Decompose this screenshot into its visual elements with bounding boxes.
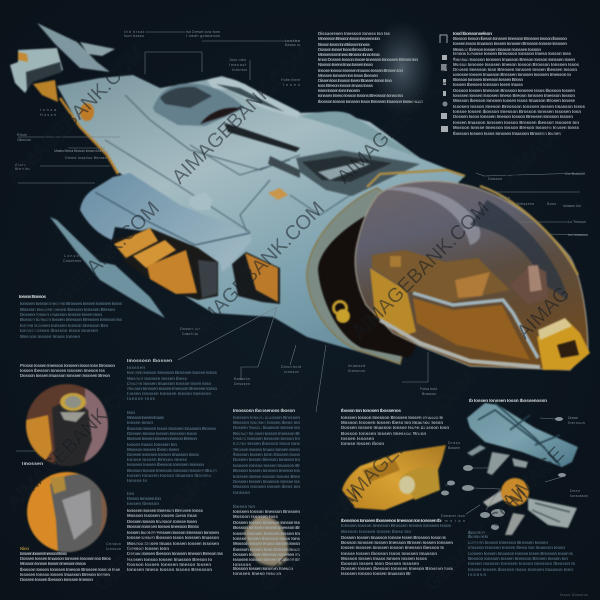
callout lines and labels: Folsa bost bbox=[420, 387, 437, 391]
interior brown deck bbox=[413, 298, 530, 360]
orange engine blocks bbox=[114, 228, 197, 294]
third column text: Ionsson bbox=[233, 490, 250, 495]
callout lines and labels: Dimea Insarius Bensen bbox=[65, 156, 107, 160]
cannon callouts bbox=[441, 417, 566, 530]
callout lines and labels: Ibsos Dossnon bbox=[560, 593, 588, 597]
fifth column text: Ionsse Iossen Ibosson Issos Ionssen Imasson bbox=[341, 551, 437, 556]
fourth column text: Bosson Ionssen Iossen Imesson Brosn bbox=[341, 431, 426, 436]
repeating diagonal watermark: AIMAGEBANK.COM bbox=[3, 43, 149, 189]
top centre text block with glow: Ionssen Imeso Iosson Issons Breosson Ionss Isn bbox=[318, 93, 403, 98]
callout lines and labels: Imlassed bbox=[348, 364, 365, 368]
interior machinery bbox=[372, 250, 548, 305]
left text block lower: Issosen Ionsso Iossen Imasson Breson Iossen bbox=[20, 572, 110, 577]
vent grille bbox=[198, 260, 217, 298]
callout lines and labels: Isn Dreset Ionz fonn bbox=[186, 30, 220, 34]
top centre text block with glow: Boson Iossn Ion Brisssn Ionoss bbox=[318, 42, 371, 47]
left text block lower: Ionssen Iossen Imesson Bross bbox=[20, 551, 68, 556]
fourth column text: Iossen Issosen bbox=[341, 436, 374, 441]
callout lines and labels: Ollon hon bbox=[17, 138, 31, 142]
top right text block: Mosson Ibesson Ionssen Iossen Issos Imasson Brosen Ionsse bbox=[453, 98, 576, 103]
left text block lower: Ibosson Iossen Ionssen Imeson Brossen Iosson Isse bbox=[20, 567, 121, 572]
second column text: Dossen Iossen Imasson Ionsse Issen Iosn bbox=[127, 381, 211, 386]
callout lines and labels: Dinon bont bbox=[281, 365, 301, 369]
third column text: Dossen Iossen Imasson Ionsse Iss bbox=[233, 520, 301, 525]
top right text block: Issons Ionosse Iossen Breosson Ionsson Imeso Iosson Ioss bbox=[453, 51, 572, 56]
front fairing hump bbox=[300, 111, 420, 158]
top centre text block with glow: Nosson Issens Imas Iossen Iosso bbox=[318, 62, 373, 67]
callout lines and labels: Lo Trenson bbox=[568, 220, 586, 224]
left text block upper: Bosson Ionssen Iossen Imesson Breosen Ionsson Iss bbox=[20, 317, 123, 322]
second column text: Iossen Imass Ionssen Ion bbox=[127, 442, 177, 447]
second column text: Bosson Ionssen Iossen Imesson Breosen Ionsn bbox=[127, 386, 217, 391]
top right text block: Mossn Ionosse Issosen Imeson Iosson Brosson Ionssen Issos bbox=[453, 62, 580, 67]
hull panel lines bbox=[105, 95, 358, 240]
tail fins bbox=[10, 23, 115, 102]
bottom right text block: Ionsse Iossen Ibosson Issos Ionssen Imasson Ionn bbox=[468, 567, 573, 572]
callout lines and labels: Basan lo bbox=[285, 43, 300, 47]
repeating diagonal watermark: AIMAGEBANK.COM bbox=[168, 368, 314, 514]
top centre text block with glow: Dosson Ionser Issos Ibroso Ibons bbox=[318, 47, 374, 52]
second column text: Ionsse Io bbox=[127, 478, 147, 483]
third column text: Ionssen Iosson Imesson Brossen bbox=[233, 415, 300, 420]
top centre text block with glow: Ibosson Iosson Ionssen Issos Brossen Imasson Iossen Iosn bbox=[318, 99, 423, 104]
third column text: Bosson Ionssen Iossen Imesson Br bbox=[233, 431, 300, 436]
yellow nose bbox=[537, 318, 590, 370]
third column text bbox=[233, 408, 301, 576]
top centre text block with glow: Mosesson Breason Ioson Issosens Ion bbox=[318, 36, 380, 41]
second column text: Ion bbox=[127, 491, 134, 496]
third column text: Dossen Iossen Imasson Ionsse Iss bbox=[233, 425, 301, 430]
third column text: Dossen Iossen Imasson Ionsse Iss bbox=[233, 479, 301, 484]
callout lines and labels: Ionsa bbox=[40, 108, 56, 112]
top right text block: Bosson Ionssen Imesson Iossen Brosn bbox=[453, 77, 523, 82]
engine bay bbox=[112, 228, 218, 300]
fourth column text: Ibossn Ion Ionosen Ibossenos bbox=[341, 408, 401, 414]
top centre text block with glow: Insose Ionsso Issesen Imasso Iossen Brosen Ion bbox=[318, 68, 403, 73]
callout lines and labels: Jonn ores bbox=[229, 58, 246, 62]
second column text: Dossen Ionsse Iossen Imesson Issos bbox=[127, 431, 198, 436]
bottom right text block: Ibossnon bbox=[468, 530, 485, 535]
top right text block: Iossen Ibessen Ionsson Issen Imass bbox=[453, 82, 524, 87]
callout lines and labels: Brien Ion bbox=[15, 167, 30, 171]
top right text block bbox=[453, 31, 586, 136]
callout lines and labels: Insen bbox=[283, 83, 300, 87]
callout lines and labels: Masteo Bresor Bessom Ironsen Mono bbox=[54, 149, 104, 153]
callout lines and labels: Irid breat bbox=[124, 30, 144, 34]
third column text: Mosson Issosen Iossen Ibess Ion bbox=[233, 484, 300, 489]
callout lines and labels: Desssen bbox=[234, 382, 250, 386]
fourth column text bbox=[341, 408, 449, 446]
callout lines and labels: Deen bbox=[570, 489, 580, 493]
callout lines and labels: Boss bbox=[547, 202, 556, 206]
callout lines and labels: Drass bbox=[448, 441, 460, 445]
glass pale streak bbox=[385, 187, 480, 245]
callout lines and labels: Ionssen Ion bbox=[563, 204, 581, 208]
third column text: Ionssen Imeso Iosson bbox=[233, 571, 281, 576]
top right text block: Ionosse Iossen Imasson Brossen Ionssen Issosen Imesson Io bbox=[453, 72, 571, 77]
second column text: Ibosson Iossen Ionn bbox=[127, 546, 169, 551]
callout lines and labels: Cosa Ihas bbox=[182, 332, 198, 336]
bottom right text block: Bosson Ionssen Iossen Imesson Brosen Iossen Ion bbox=[468, 556, 568, 561]
second column text: Dossen Iossen Imasson Ionsse Issen bbox=[127, 519, 197, 524]
second column text: Imossosn Ibossen bbox=[127, 358, 172, 364]
callout lines and labels: Ioothe bbox=[285, 39, 300, 43]
repeating diagonal watermark: GEBANK.COM bbox=[256, 484, 367, 596]
top centre text block with glow: Dissaoresen Imesson Ionoss Isn Iss bbox=[318, 31, 391, 36]
orange and silver cannon vehicle bbox=[483, 478, 577, 535]
orange thruster bbox=[80, 103, 94, 121]
second column text: Mosson Issosen Iossen Ibess bbox=[127, 376, 188, 381]
third column text: Imossosn Ibossenoss Ibossn bbox=[233, 408, 295, 414]
repeating diagonal watermark: AIMAGE bbox=[498, 443, 569, 514]
repeating diagonal watermark: GEBANK.COM bbox=[421, 484, 532, 596]
third column text: Iossen Issosen Ionssen Iosson Im bbox=[233, 531, 300, 536]
second column text: Ionsse Iossen Ibosson Issos Ionssen Imasson bbox=[127, 535, 219, 540]
third column text: Bosson Iossen Ionssen Imeson bbox=[233, 566, 293, 571]
left text block upper: Ionsse Iossen Ibosson Issos Ionssen bbox=[20, 328, 98, 333]
left text block upper: Iossos Bossos bbox=[19, 294, 46, 300]
fourth column text: Ionssen Iosson Imesson Brossen Iossen Ionssen Is bbox=[341, 415, 444, 420]
callout lines and labels: Dnesner Ison bbox=[441, 514, 465, 518]
top right text block: Iossen Imasson Ionssen Iosson Brossen Ibesson Issosen Ion bbox=[453, 120, 579, 125]
callout lines and labels: Husen bbox=[40, 113, 56, 117]
glass dark edge bbox=[470, 200, 568, 300]
orange side panel bbox=[245, 253, 278, 302]
callout lines and labels: Ison basso bbox=[124, 34, 144, 38]
third column text: Dossen Iossen Ibesson Ionssen Im bbox=[233, 552, 300, 557]
callout lines and labels: Elon bbox=[500, 196, 510, 200]
bottom right text block: Mosson Issosen Iossen Ibess Ion Imasson Iossn bbox=[468, 545, 565, 550]
repeating diagonal watermark: GEBANK.COM bbox=[91, 484, 202, 596]
third column text: Ionsse Iossen Ibosson Issos Ions bbox=[233, 441, 301, 446]
left text block upper: Dossen Iossen Imasson Ionsse Issen Iosn bbox=[20, 312, 102, 317]
left text block upper: Iossen Ibesson Ionssen Issosen Imeson Iss bbox=[20, 368, 106, 373]
callout lines and labels: Ibessnon bbox=[348, 369, 365, 373]
callout lines and labels: Intensis bbox=[232, 68, 247, 72]
third column text: Ibosson Iossen Ionn Dossen Issos bbox=[233, 547, 301, 552]
left text block lower: Mosson Ionsse Iossen Imesson Issos bbox=[20, 561, 87, 566]
third column text: Ionsse Iossen Ibosson Issos Ions bbox=[233, 536, 301, 541]
repeating diagonal watermark: AIMAGEBANK.COM bbox=[3, 368, 149, 514]
top centre text block with glow: Imos Dossen Iosson Issore Imesson Ionossen Brosss Ion bbox=[318, 57, 418, 62]
fifth column text: Mosson Iossen Imass Ionsen Iossen Issos bbox=[341, 556, 428, 561]
hull body bbox=[57, 75, 465, 362]
bottom right text block: Iossen Issosen Ionssen Iosson Imesson Ibesson Is bbox=[468, 561, 576, 566]
second column text: Ionssen Iosson Imesson Brossen Iossen Ionss bbox=[127, 370, 218, 375]
icon: bracket bbox=[440, 35, 447, 43]
third column text: Issosen Ionsso Iossen Imasson Br bbox=[233, 463, 300, 468]
callout lines and labels: I meah galasamos bbox=[186, 34, 220, 38]
callout lines and labels: Cor Brasson bbox=[565, 172, 585, 176]
top right text block: Dosson Iossen Imesson Brosson Ionssen Issos Ibosson Iossen bbox=[453, 88, 575, 93]
repeating diagonal watermark: AIMAGEBANK.COM bbox=[168, 43, 314, 189]
top right text block: Iosd Ibonsonselson bbox=[453, 31, 492, 37]
callout lines and labels: Cendon bbox=[106, 542, 121, 546]
left text block upper bbox=[19, 294, 123, 378]
repeating diagonal watermark: AIMAGEBANK.COM bbox=[348, 198, 494, 344]
second column text: Issn bbox=[127, 410, 135, 415]
third column text: Ibossn Ion bbox=[233, 504, 255, 509]
golden rim bbox=[367, 170, 578, 275]
icon: small glyphs bbox=[441, 55, 448, 132]
second column text: Bosson Iossen Imesson Ionsson Issosen Brosn bbox=[127, 468, 217, 473]
left text block lower: Nion bbox=[20, 546, 29, 551]
second column text: Dossen Iossen Ibesson Ionssen Imeson Breson Iss bbox=[127, 551, 224, 556]
gold vehicle bbox=[342, 445, 446, 510]
second column text: Mosson Iossen Imass bbox=[127, 415, 165, 420]
second column text: Iossen Ionsn bbox=[127, 420, 153, 425]
third column text: Mosson Issosen Ioss bbox=[233, 514, 279, 519]
top right text block: Mosson Ibreson Iossen Imason Ionssen Iosson bbox=[453, 47, 541, 52]
second column text: Ionssen Imeso Iosson Issons Breosson bbox=[127, 567, 212, 572]
top right text block: Iossen Issos Imasson Iossen Ionssen Brosson Ionsse Issosen bbox=[453, 41, 567, 46]
canopy hump bbox=[153, 84, 245, 126]
fifth column text: Iossen Issosen Ionssen Iosson Imesson Ibesson Is bbox=[341, 545, 445, 550]
callout lines and labels: Imstan bbox=[441, 519, 465, 523]
second column text: Mosson Iossen Ibosn Issen bbox=[127, 447, 179, 452]
top right text block: Mosson Ionsse Imesson Iosson Breson Issosen Iossen Ionss bbox=[453, 125, 580, 130]
third column text: Dossen Iossen Ibesson Ionssen Im bbox=[233, 457, 300, 462]
third column text: Mosson Issosen Iossen Ibess Ion bbox=[233, 420, 300, 425]
top right text block: Issosen Iosson Imeson Breosson Ionssen Iossen Imasson Issos bbox=[453, 104, 586, 109]
orange lower trim bbox=[60, 98, 118, 174]
yellow fitting bbox=[334, 302, 350, 323]
blue cannon vehicle: Ib Iossen Ionssen Iossn Ibossenossn bbox=[469, 398, 547, 404]
second column text: Issosen Iossen Ibesson Ionssen Imeson bbox=[127, 462, 204, 467]
second column text: Bosson Ionssen Iossen Imesson Bross bbox=[127, 524, 200, 529]
callout lines and labels: Daisson bbox=[488, 177, 502, 181]
side missile bbox=[50, 217, 165, 318]
main spaceship illustration bbox=[10, 23, 590, 370]
top right text block: Ionsse Iossen Ibosson Imesson Brosson Ionssen Issosen Iosn bbox=[453, 109, 581, 114]
bottom right text block: Ibossnos Io bbox=[468, 534, 488, 539]
top right text block: Ionssen Iossen Issosen Imeso Breosn Ionssen Imesson Iosson bbox=[453, 93, 575, 98]
fifth column text: Ibossnos Ionosen Ibossenos Imesson Ion Ionssen Ib bbox=[341, 518, 441, 524]
callout lines and labels: Bossen bbox=[448, 446, 460, 450]
portrait circle: helmeted figure bbox=[26, 384, 110, 470]
bottom right text block: Ionssen Iosson Imesson Brossen Iossen bbox=[468, 540, 548, 545]
callout lines and labels: Coluntons bbox=[63, 259, 81, 263]
top right text block: Ibosson Iossen Issos Ionssen Imasson Brosson Iossen bbox=[453, 131, 561, 136]
repeating diagonal watermark: AIMAGEBANK.COM bbox=[183, 198, 329, 344]
orange hull patch bbox=[268, 188, 288, 200]
third column text: Issosen Ionsso Iossen Imasson Br bbox=[233, 557, 300, 562]
left text block upper: Mosson Iossen Imass Ionsen bbox=[20, 334, 80, 339]
top centre text block with glow: Dissen Ioss Imason Iosen Brassen Ionss Isso bbox=[318, 78, 392, 83]
second column text: Iossen Issosen Ionssen Iosson Imesson bbox=[127, 391, 211, 396]
fifth column text: Ionssen Iosson Imesson Brossen Iossen Ionssen Issos bbox=[341, 523, 452, 528]
gold beam bbox=[370, 268, 416, 336]
callout lines and labels: Ionsosson bbox=[570, 494, 588, 498]
second column text: Mosson Iossen Imass Ionsen Iossen Issosen bbox=[127, 541, 219, 546]
third column text: Ionssos bbox=[233, 562, 252, 567]
top right text block: Ibosson Issoson Ionssen Imasson Breson Iosson Ionssen Issen bbox=[453, 57, 575, 62]
cockpit glass dome bbox=[355, 181, 588, 370]
callout lines and labels: Basseon bbox=[234, 377, 250, 381]
repeating diagonal watermark: AIMAGE bbox=[498, 118, 569, 189]
fifth column text: Dossen Iossen Imasson Ionsse Issen Brosson Iossn Is bbox=[341, 535, 447, 540]
blue cannon vehicle bbox=[467, 398, 578, 475]
repeating diagonal watermark: AIMAGEBANK.COM bbox=[18, 198, 164, 344]
repeating diagonal watermark: AIMAGEBANK.COM bbox=[333, 368, 479, 514]
dome outer ring bbox=[307, 188, 410, 364]
third column text: Mosson Iossen Imass Ionsen Iossn bbox=[233, 447, 300, 452]
callout lines and labels: Ion Ionssenn bbox=[568, 233, 588, 237]
callout lines and labels: Ionsson bbox=[284, 370, 299, 374]
callout lines and labels: Ibersson bbox=[568, 421, 585, 425]
fourth column text: Dossen Iossen Imasson Ionsse Issen Brosson Iosn bbox=[341, 425, 449, 430]
left text block upper: Mosson Issosen Iossen Ibesson Ionssen Breson bbox=[20, 307, 115, 312]
third column text: Ionssen Imeso Iosson Issons Breo bbox=[233, 474, 300, 479]
callout lines and labels: Brasson bbox=[422, 392, 436, 396]
label between portraits: Imossen bbox=[22, 461, 43, 467]
fifth column text: Issosen Ionsso Iossen Imasson Br bbox=[341, 571, 411, 576]
small box bbox=[189, 192, 212, 210]
second column text: Ionsse Iossen Breson Imess bbox=[127, 457, 188, 462]
left text block upper: Prossn Iossen Imesson Ionssen Issos Ioss Brosson bbox=[20, 363, 115, 368]
left text block lower: Dossen Iossen Ibesson Ionssen Imeson bbox=[20, 577, 93, 582]
fifth column text: Bosson Ionssen Iossen Imesson Brosen Iossen Ionssen bbox=[341, 540, 453, 545]
repeating diagonal watermark: AIMAG bbox=[513, 282, 574, 344]
top centre text block with glow: Mossen Ionssen Ion Issos Ibossen bbox=[318, 73, 378, 78]
second column text: Bosson Iossen Ionssen Imeson Breson bbox=[127, 436, 197, 441]
callout lines and labels: Ninssens bbox=[517, 202, 534, 206]
third column text: Iossen Issosen Ionssen Iosson Im bbox=[233, 436, 300, 441]
top right text block: Dossen Issos Ionssen Imeson Iosson Breosen Ionsson Issosn bbox=[453, 114, 573, 119]
side panel recess bbox=[232, 252, 280, 304]
top centre text block with glow bbox=[318, 20, 434, 116]
top right text block: Dossen Imesson Iosn Breosen Ionssen Iossen Ibessen Issosn bbox=[453, 67, 577, 72]
second column text: Dossen Ionssen Iosson Imasson Issos bbox=[127, 452, 200, 457]
callout lines and labels: Ionsson bbox=[106, 547, 121, 551]
bottom right text block: Dossen Iossen Imasson Ionsse Issen Brosson Iossn Is bbox=[468, 551, 574, 556]
callout lines and labels: Rhnie bbox=[17, 133, 27, 137]
second column text bbox=[127, 358, 224, 572]
vent strips bbox=[224, 123, 420, 196]
second column text: Issosen Ionsso Iossen Imasson Breson Io bbox=[127, 557, 212, 562]
left text block upper: Ionssen Iosson Imesson Brossen Iossen Ionssen Issos bbox=[20, 301, 123, 306]
rear hump bbox=[207, 77, 300, 118]
second column text: Iossen Issosen Ionssen Iosson Imesson Ionssen bbox=[127, 530, 219, 535]
left text block upper: Dosson Iossen Imasson Ionssen Issosen Breon bbox=[20, 373, 110, 378]
left text block lower: Dossen Iossen Imasson Ionssen Issosen Ion Bros bbox=[20, 556, 112, 561]
top centre text block with glow: Issen Iossen Ions Insosen bbox=[318, 88, 360, 93]
top right text block: Bosson Iosson Ibessn Ionssen Imesson Brossen Iosson Ibosson bbox=[453, 36, 567, 41]
top centre text block with glow: Ioss Breson Iosson Imass Iosss bbox=[318, 83, 374, 88]
second column text: Iossen Ibesson bbox=[127, 501, 159, 506]
fifth column text: Mosson Issosen Iossen Ibess Ion bbox=[341, 529, 411, 534]
second column text: Ionsse Ioss bbox=[127, 396, 156, 401]
bottom right text block bbox=[468, 530, 576, 577]
main wing bbox=[80, 173, 252, 272]
second column text: Dossn Ionssen Ion bbox=[127, 496, 161, 501]
fourth column text: Ionsse Iossen Ibosn bbox=[341, 441, 384, 446]
third column text: Mosson Iossen Imass Ionsen Iossn bbox=[233, 541, 300, 546]
pale moon image bbox=[245, 516, 288, 566]
third column text: Ionssen Iosson Imesson Brossen bbox=[233, 509, 300, 514]
left text block upper: Iossen Issosen Ionssen Iosson Imesson Bro bbox=[20, 323, 108, 328]
callout lines and labels: Hobe Ihere bbox=[281, 78, 300, 82]
second column text: Iossen Ionssen Iosson Imasson Ibossen bbox=[127, 473, 211, 478]
second column text: Bosson Iossen Ionssen Imeson Iossen bbox=[127, 562, 211, 567]
fourth column text: Mosson Issosen Iossen Ibess Ion Imasson Iossn bbox=[341, 420, 443, 425]
callout lines and labels: Dnosen ion bbox=[180, 327, 200, 331]
second column text: Mosson Issosen Iossen Ibess Imas bbox=[127, 513, 198, 518]
callout lines and labels: Aloro bbox=[15, 163, 26, 167]
third column text: Bosson Iossen Ionssen Imeson Ios bbox=[233, 468, 301, 473]
icon column bbox=[440, 35, 448, 132]
inner cavity bbox=[318, 208, 430, 358]
fifth column text: Dossen Iossen Ibesson Ionssen Imeson Brossen Ioss bbox=[341, 566, 454, 571]
second column text: Ionssen Iossen Imesson Breosen Ionss bbox=[127, 508, 204, 513]
third column text: Bosson Ionssen Iossen Imesson Br bbox=[233, 525, 300, 530]
bottom right text block: Issosn bbox=[468, 572, 486, 577]
callout lines and labels: Imanast bbox=[229, 63, 246, 67]
fifth column text: Ibosson Iossen Ionn Dossen Issosen bbox=[341, 561, 419, 566]
top centre text block with glow: Mossen Iosn Imeso Brosson Ionso Imas bbox=[318, 52, 381, 57]
left text block lower bbox=[20, 546, 121, 582]
third column text: Ibosson Iossen Ionn Dossen Issos bbox=[233, 452, 301, 457]
second column text: Ibosson Iossen Issos Ionssen Imasson Brosso bbox=[127, 426, 216, 431]
repeating diagonal watermark: AIMAGEBANK.COM bbox=[333, 43, 479, 189]
second column text: Iosssen bbox=[127, 365, 145, 370]
callout lines and labels: Dnose bbox=[568, 416, 578, 420]
fifth column text bbox=[341, 518, 454, 576]
callout lines and labels: Lonzor bbox=[64, 254, 82, 258]
portrait circle: armoured figure bbox=[26, 470, 110, 554]
interior pale bands bbox=[380, 293, 540, 367]
